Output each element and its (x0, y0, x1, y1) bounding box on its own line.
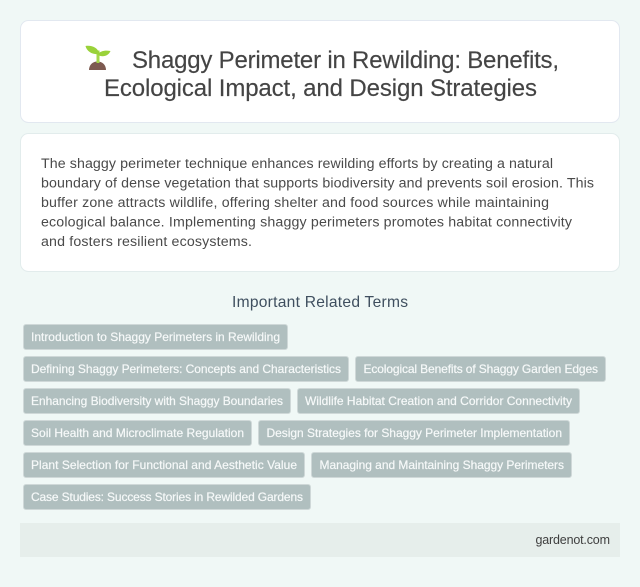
tag: wildlife habitat: Wildlife Habitat Creation and Corridor Connectivity (305, 394, 572, 408)
title: Ecological Impact, and Design Strategies (104, 75, 537, 102)
tag: plant selection (24, 452, 304, 478)
tag: enhancing biodiversity: Enhancing Biodiversity with Shaggy Boundaries (31, 394, 283, 408)
description text: The shaggy perimeter technique enhances rewilding efforts by creating a natural (41, 156, 553, 172)
tag: soil health (24, 420, 252, 446)
heading: important related terms: Important Related Terms (232, 294, 408, 311)
title (104, 47, 559, 102)
tag: design strategies: Design Strategies for Shaggy Perimeter Implementation (266, 426, 562, 440)
tag: case studies: Case Studies: Success Stories in Rewilded Gardens (31, 490, 303, 504)
tag: enhancing biodiversity (24, 388, 290, 414)
description text: buffer zone attracts wildlife, offering shelter and food sources while maintaining (41, 195, 549, 211)
description text: ecological balance. Implementing shaggy perimeters promotes habitat connectivity (41, 214, 573, 230)
tag: managing: Managing and Maintaining Shaggy Perimeters (320, 458, 564, 472)
icon: sprout (86, 46, 110, 70)
panel: description (20, 134, 620, 272)
footer (20, 523, 620, 557)
tag: soil health: Soil Health and Microclimate Regulation (31, 426, 244, 440)
tag: design strategies (258, 420, 570, 446)
tag: introduction (24, 324, 288, 350)
description text: boundary of dense vegetation that supports biodiversity and prevents soil erosion. This (41, 176, 594, 192)
tag: case studies (24, 484, 310, 510)
tag: ecological benefits (356, 356, 606, 382)
panel: related term tags (24, 324, 606, 510)
tag: ecological benefits: Ecological Benefits of Shaggy Garden Edges (364, 362, 598, 376)
tag: wildlife habitat (298, 388, 580, 414)
tag: defining: Defining Shaggy Perimeters: Concepts and Characteristics (31, 362, 341, 376)
tag: managing (312, 452, 572, 478)
panel: title card (20, 20, 620, 122)
title: Shaggy Perimeter in Rewilding: Benefits, (132, 47, 559, 74)
tag: defining (24, 356, 348, 382)
tag: plant selection: Plant Selection for Functional and Aesthetic Value (31, 458, 297, 472)
description text (41, 156, 594, 250)
tag: introduction: Introduction to Shaggy Perimeters in Rewilding (31, 330, 280, 344)
footer: gardenot.com (536, 533, 610, 547)
description text: and fosters resilient ecosystems. (41, 234, 252, 250)
